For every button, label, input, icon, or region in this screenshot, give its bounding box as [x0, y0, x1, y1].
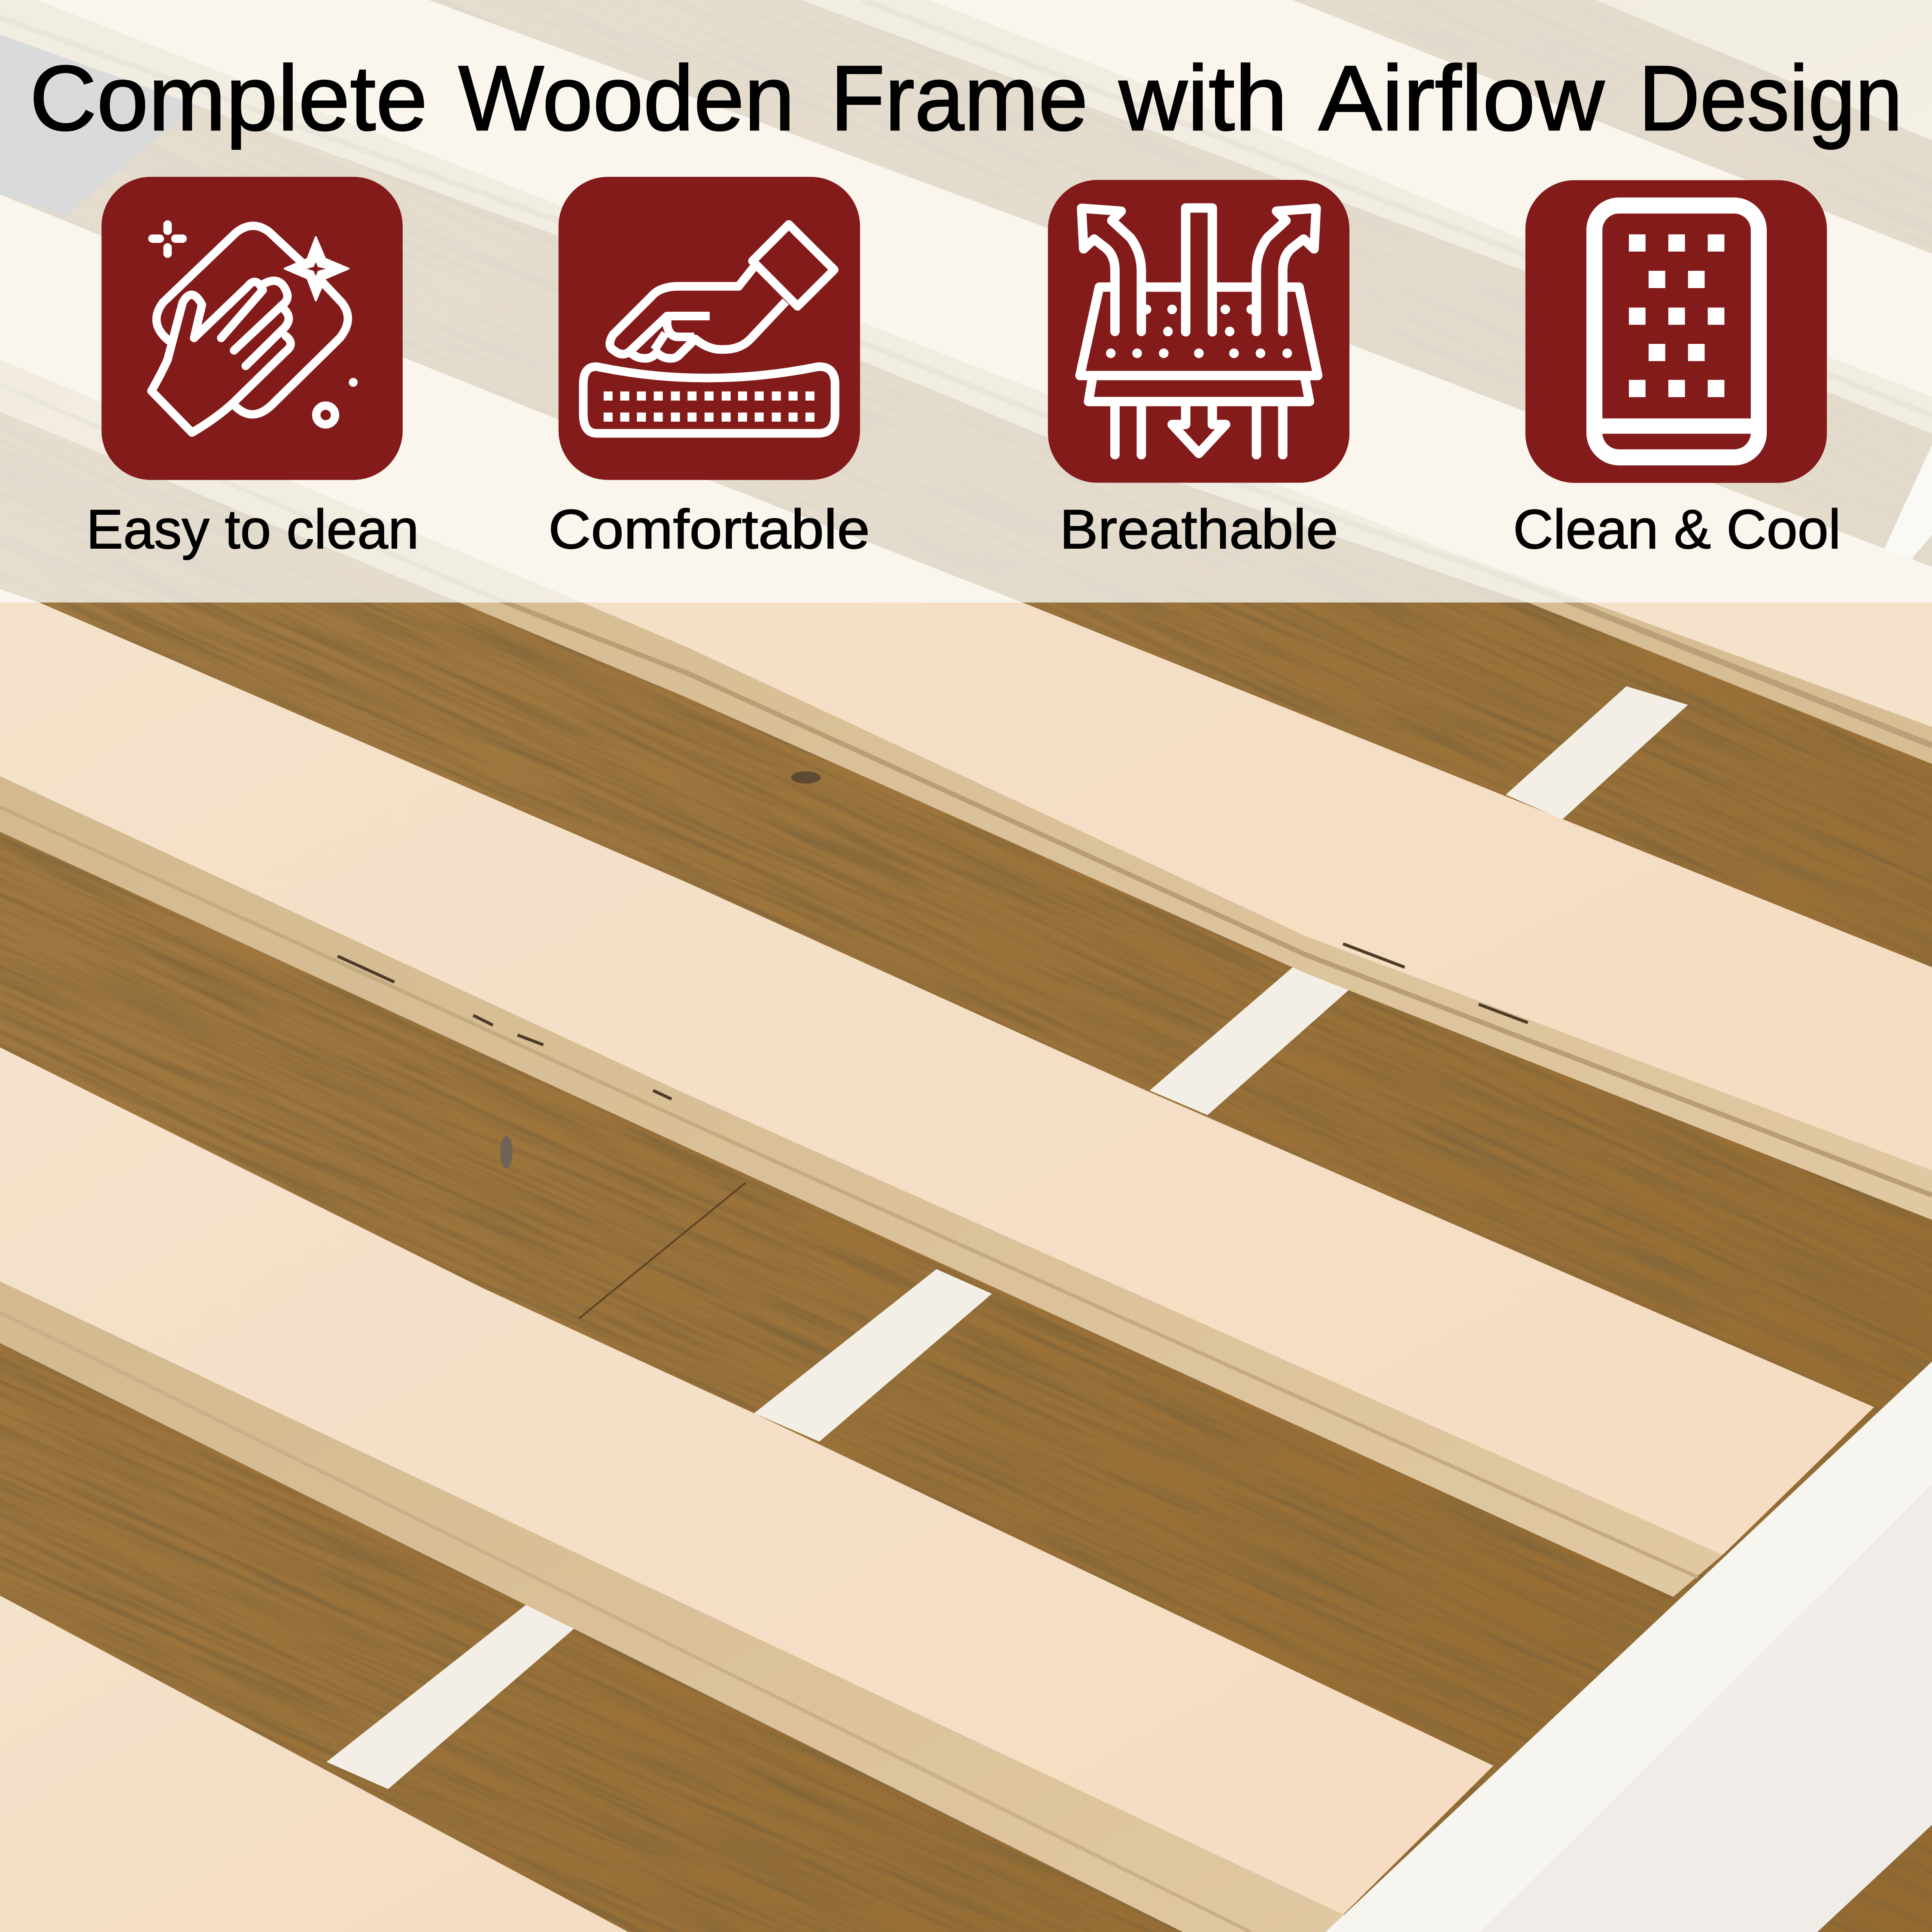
title: Complete	[30, 46, 428, 150]
title: with	[1118, 46, 1288, 150]
white webbing straps	[327, 445, 1932, 1789]
slat A	[0, 194, 1932, 1220]
icon: easy to clean	[101, 177, 403, 480]
title: Wooden	[459, 46, 795, 150]
grey wall at far left	[0, 34, 197, 216]
title: Design	[1639, 46, 1902, 150]
far slats	[0, 0, 1932, 764]
top translucent header band	[0, 0, 1932, 602]
slat B	[0, 589, 1874, 1597]
icon: comfortable	[559, 177, 860, 480]
white bed frame rail	[1326, 1361, 1932, 1932]
icon: breathable	[1048, 180, 1349, 483]
slat C	[0, 1047, 1493, 1932]
label: breathable: Breathable	[1060, 498, 1338, 560]
icon: clean and cool	[1525, 180, 1827, 483]
label: comfortable: Comfortable	[548, 498, 870, 560]
title	[30, 46, 1902, 150]
slat D	[0, 1596, 629, 1932]
label: easy to clean: Easy to clean	[86, 498, 419, 560]
knots and cracks in base	[500, 772, 820, 1318]
label: clean and cool: Clean & Cool	[1513, 498, 1841, 560]
title: Airflow	[1318, 46, 1604, 150]
title: Frame	[830, 46, 1088, 150]
